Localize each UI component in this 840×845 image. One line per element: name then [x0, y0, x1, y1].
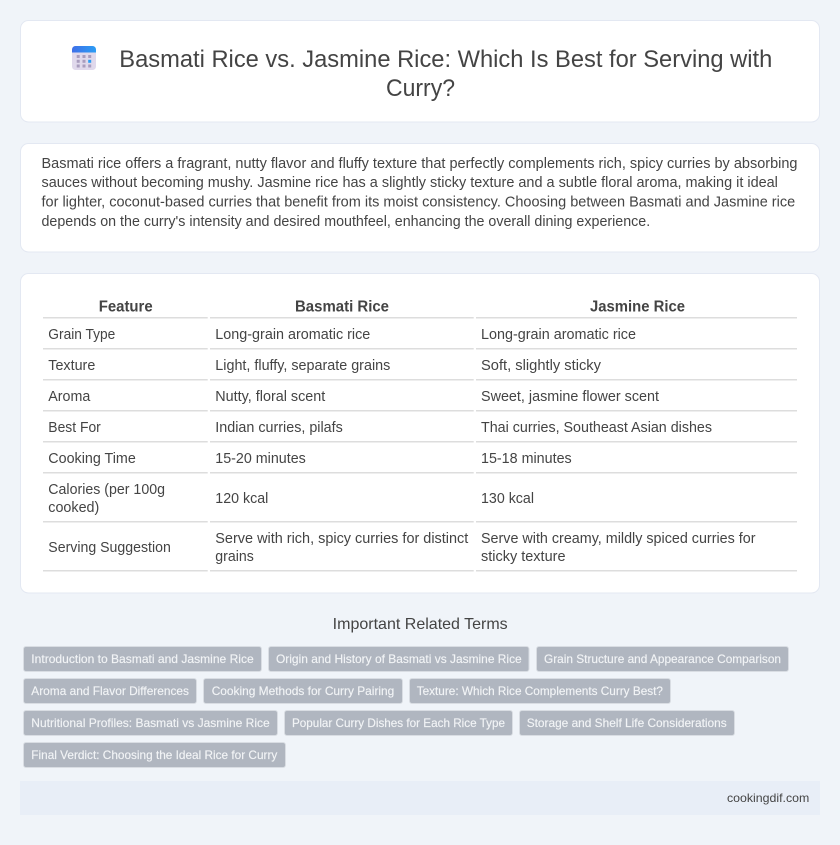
text block: intro paragraph: depends on the curry's intensity and desired mouthfeel, enhancing the overall dining experience.: [42, 214, 650, 230]
row: calories: cooked): [48, 500, 99, 516]
heading: important related terms: Important Related Terms: [333, 616, 508, 633]
footer: cookingdif.com: [727, 791, 809, 805]
table header row: [99, 298, 685, 316]
tag: [24, 646, 262, 672]
row: grain type: Long-grain aromatic rice: [215, 327, 370, 343]
row: calories: 130 kcal: [481, 491, 534, 507]
row: texture: Light, fluffy, separate grains: [215, 358, 390, 374]
tag: Grain Structure and Appearance Comparison: [544, 652, 781, 666]
table header row: Feature: [99, 298, 153, 316]
panel: related term tags: [24, 646, 788, 768]
tag: Texture: Which Rice Complements Curry Best?: [417, 684, 663, 698]
row: serving suggestion: [48, 531, 756, 565]
row: serving suggestion: grains: [215, 549, 254, 565]
footer: [20, 781, 820, 815]
text block: intro paragraph: sauces without becoming mushy. Jasmine rice has a slightly sticky texture and a subtle floral aroma, making it ideal: [42, 175, 778, 191]
row: best for: Thai curries, Southeast Asian dishes: [481, 420, 712, 436]
tag: Introduction to Basmati and Jasmine Rice: [31, 652, 254, 666]
table header row: Jasmine Rice: [590, 298, 685, 316]
row: best for: Best For: [48, 420, 101, 436]
tag: [24, 710, 278, 736]
tag: Final Verdict: Choosing the Ideal Rice for Curry: [31, 748, 277, 762]
row: cooking time: 15-18 minutes: [481, 451, 572, 467]
tag: Storage and Shelf Life Considerations: [527, 716, 727, 730]
row: serving suggestion: Serve with creamy, mildly spiced curries for: [481, 531, 756, 547]
text block: intro paragraph: [42, 156, 798, 230]
row: calories: 120 kcal: [215, 491, 268, 507]
panel: header: [20, 20, 820, 122]
tag: Origin and History of Basmati vs Jasmine Rice: [276, 652, 522, 666]
row: serving suggestion: Serve with rich, spicy curries for distinct: [215, 531, 468, 547]
panel: comparison table: [20, 274, 820, 593]
table header row: Basmati Rice: [295, 298, 389, 316]
row: cooking time: [48, 451, 572, 467]
tag: Nutritional Profiles: Basmati vs Jasmine Rice: [31, 716, 270, 730]
row: calories: [48, 482, 534, 516]
row: serving suggestion: sticky texture: [481, 549, 566, 565]
tag: [268, 646, 529, 672]
row: aroma: [48, 389, 659, 405]
row: grain type: [48, 327, 636, 343]
tag: [24, 678, 196, 704]
row: aroma: Aroma: [48, 389, 91, 405]
row: aroma: Nutty, floral scent: [215, 389, 325, 405]
tag: [284, 710, 512, 736]
text block: intro paragraph: Basmati rice offers a fragrant, nutty flavor and fluffy texture that perfectly complements rich, spicy curries by absorbing: [42, 156, 798, 172]
row: best for: [48, 420, 712, 436]
icon: calendar: [72, 46, 96, 70]
row: texture: Soft, slightly sticky: [481, 358, 602, 374]
title: [119, 46, 772, 102]
panel: introduction: [20, 144, 820, 252]
row: cooking time: 15-20 minutes: [215, 451, 306, 467]
tag: Popular Curry Dishes for Each Rice Type: [292, 716, 505, 730]
row: serving suggestion: Serving Suggestion: [48, 540, 171, 556]
title: Curry?: [386, 75, 455, 102]
tag: [410, 678, 670, 704]
tag: [204, 678, 402, 704]
tag: [24, 742, 286, 768]
row: calories: Calories (per 100g: [48, 482, 165, 498]
row: texture: [48, 358, 602, 374]
text block: intro paragraph: for lighter, coconut-based curries that benefit from its moist consistency. Choosing between Basmati and Jasmine rice: [42, 194, 795, 210]
tag: Cooking Methods for Curry Pairing: [212, 684, 394, 698]
row: aroma: Sweet, jasmine flower scent: [481, 389, 659, 405]
tag: [520, 710, 734, 736]
title: Basmati Rice vs. Jasmine Rice: Which Is Best for Serving with: [119, 46, 772, 73]
row: grain type: Grain Type: [48, 327, 115, 343]
tag: [536, 646, 788, 672]
row: grain type: Long-grain aromatic rice: [481, 327, 636, 343]
row: texture: Texture: [48, 358, 95, 374]
row: best for: Indian curries, pilafs: [215, 420, 343, 436]
row: cooking time: Cooking Time: [48, 451, 136, 467]
tag: Aroma and Flavor Differences: [31, 684, 189, 698]
